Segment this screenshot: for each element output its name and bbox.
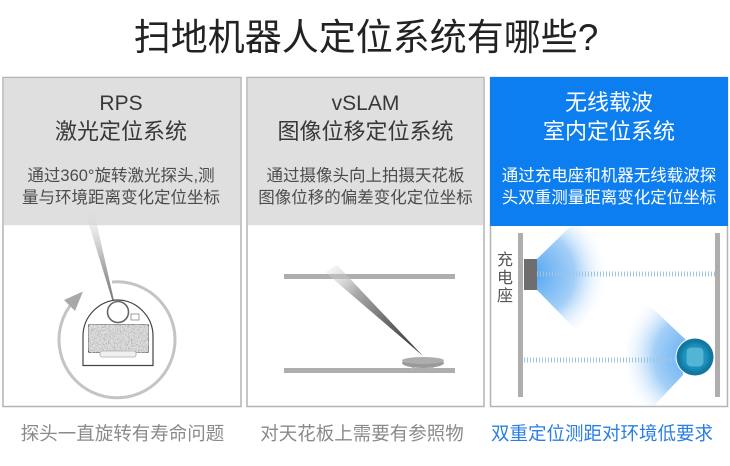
heading: wireless carrier: 无线载波 <box>565 90 653 115</box>
icon: rotation arrow <box>59 282 175 398</box>
heading: indoor positioning: 室内定位系统 <box>543 119 675 144</box>
caption: wireless carrier: 双重定位测距对环境低要求 <box>491 423 713 444</box>
signal line: dock <box>537 272 716 276</box>
label: charging dock: 座 <box>497 287 513 305</box>
description: wireless carrier: 头双重测量距离变化定位坐标 <box>502 188 716 207</box>
description: wireless carrier: 通过充电座和机器无线载波探 <box>502 166 716 185</box>
icon: laser beam <box>85 212 114 301</box>
title: 扫地机器人定位系统有哪些? <box>134 17 598 58</box>
description: vSLAM <box>258 166 473 207</box>
heading: image displacement: 图像位移定位系统 <box>277 119 454 144</box>
panel: RPS <box>3 78 241 406</box>
description: RPS <box>22 166 220 207</box>
caption: RPS: 探头一直旋转有寿命问题 <box>21 423 224 444</box>
icon: robot vacuum <box>83 300 153 366</box>
charging dock <box>524 259 537 290</box>
signal cones <box>537 222 686 410</box>
description: wireless carrier <box>502 166 716 207</box>
description: RPS: 量与环境距离变化定位坐标 <box>22 188 220 207</box>
icon: robot side view <box>402 357 444 369</box>
signal line: robot <box>524 358 678 362</box>
caption: vSLAM: 对天花板上需要有参照物 <box>260 423 464 444</box>
icon: camera beam <box>325 265 423 356</box>
label: charging dock: 电 <box>497 269 513 287</box>
panel: wireless carrier <box>490 77 728 410</box>
description: RPS: 通过360°旋转激光探头,测 <box>27 166 215 185</box>
icon: robot top view <box>676 338 714 376</box>
ceiling and floor bars <box>284 274 455 373</box>
heading: vSLAM: vSLAM <box>332 92 399 115</box>
description: vSLAM: 图像位移的偏差变化定位坐标 <box>258 188 473 207</box>
label: charging dock <box>497 251 513 305</box>
label: charging dock: 充 <box>497 251 513 269</box>
heading: RPS: RPS <box>99 92 143 115</box>
walls <box>518 233 720 397</box>
heading: laser positioning: 激光定位系统 <box>55 119 187 144</box>
panel: vSLAM <box>247 78 484 406</box>
description: vSLAM: 通过摄像头向上拍摄天花板 <box>266 166 464 185</box>
